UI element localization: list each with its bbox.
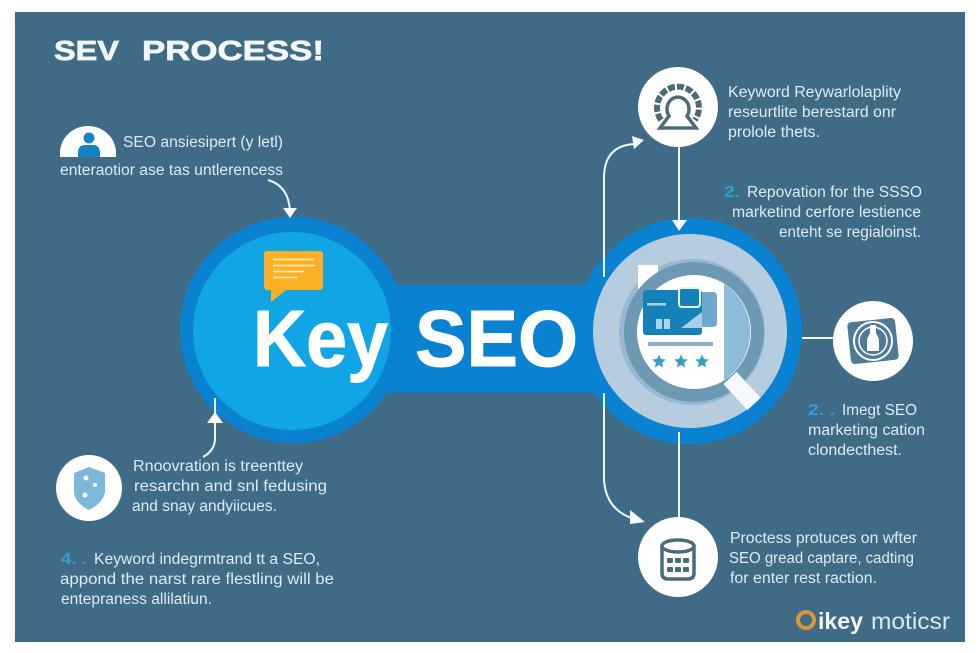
- connector arrows: right flow: [604, 144, 834, 519]
- title: [54, 35, 324, 66]
- text: step 2 renovation: marketind cerfore lestience: [732, 204, 921, 221]
- text: renovation note: resarchn and snl fedusing: [134, 478, 327, 495]
- text: top note: prolole thets.: [728, 124, 820, 141]
- text: step 4: 4. .: [61, 551, 87, 568]
- headline: Key SEO: Key: [253, 294, 388, 383]
- text: step 2 integrate: marketing cation: [808, 422, 925, 439]
- text: process note: SEO gread captare, cadting: [729, 550, 914, 567]
- icon: user: [60, 126, 116, 157]
- text: process note: Proctess protuces on wfter: [730, 530, 917, 547]
- text: step 4: [60, 551, 334, 608]
- icon: shield circle: [56, 455, 122, 521]
- logo: ikey: [818, 608, 863, 634]
- text: step 2 integrate: Imegt SEO: [842, 402, 917, 419]
- icon: top circle badge: [638, 67, 718, 147]
- text: step 4: entepraness allilatiun.: [61, 591, 212, 608]
- text: step 2 integrate: clondecthest.: [808, 442, 902, 459]
- text: user note: enteraotior ase tas untlerencess: [60, 162, 283, 179]
- text: top note: Keyword Reywarlolaplity: [728, 84, 901, 101]
- icon: database circle: [638, 517, 718, 597]
- arrow: to left hub from top: [268, 180, 297, 218]
- text: step 2 integrate: [808, 402, 925, 459]
- left hub circle: [180, 217, 406, 443]
- text: renovation note: Rnoovration is treenttey: [133, 458, 303, 475]
- text: step 2 integrate: 2. .: [808, 402, 835, 419]
- title: SEV: [54, 35, 119, 66]
- icon: right circle badge: [833, 301, 913, 381]
- text: process note: for enter rest raction.: [730, 570, 877, 587]
- logo: moticsr: [871, 608, 950, 634]
- right hub circle: [576, 218, 802, 444]
- arrow: to left hub from bottom: [203, 398, 223, 457]
- central connector band: [380, 285, 600, 393]
- text: process note: [729, 530, 917, 587]
- text: step 2 renovation: enteht se regialoinst.: [779, 224, 921, 241]
- headline: Key SEO: SEO: [415, 294, 578, 383]
- icon: speech bubble: [264, 251, 323, 302]
- arrowheads: right flow: [630, 136, 687, 524]
- text: step 2 renovation: Repovation for the SSSO: [747, 184, 922, 201]
- text: top note: [728, 84, 901, 141]
- text: step 2 renovation: 2.: [724, 184, 740, 201]
- icon: magnifier over document: [619, 259, 765, 405]
- title: PROCESS!: [142, 35, 324, 66]
- text: top note: reseurtlite berestard onr: [728, 104, 896, 121]
- headline: Key SEO: [253, 294, 578, 383]
- text: step 2 renovation: [724, 184, 922, 241]
- logo: [798, 608, 950, 634]
- text: step 4: appond the narst rare flestling will be: [60, 571, 334, 588]
- text: step 4: Keyword indegrmtrand tt a SEO,: [94, 551, 320, 568]
- text: renovation note: and snay andyiicues.: [132, 498, 277, 515]
- text: user note: [60, 134, 283, 179]
- text: renovation note: [132, 458, 327, 515]
- text: user note: SEO ansiesipert (y letl): [123, 134, 283, 151]
